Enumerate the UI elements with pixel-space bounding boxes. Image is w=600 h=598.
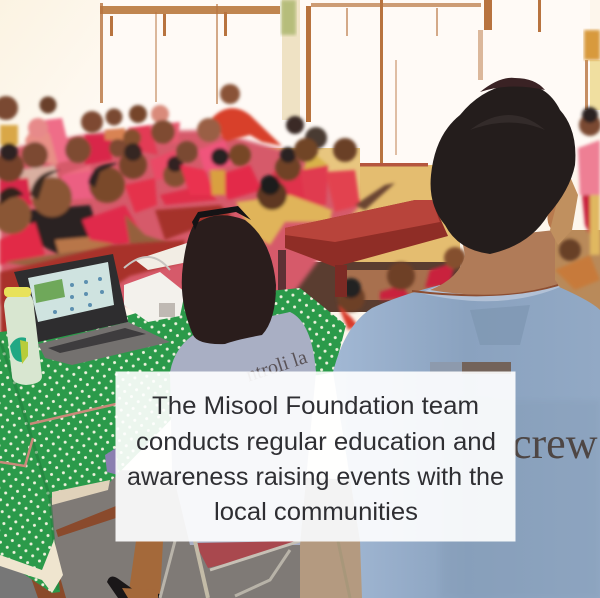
woman grey shirt <box>170 312 316 545</box>
caption line 1: The Misool Foundation team <box>152 392 479 420</box>
shoe <box>107 576 160 598</box>
desk: left row <box>0 240 185 345</box>
caption line 3: awareness raising events with the <box>127 463 504 491</box>
right-side students <box>337 107 600 330</box>
man blue t-shirt <box>333 283 600 598</box>
lace trim <box>0 540 63 593</box>
shirt lettering: ntroli la <box>243 346 310 386</box>
water bottle <box>4 287 42 385</box>
caption line 2: conducts regular education and <box>136 428 496 456</box>
man hair <box>431 84 575 254</box>
laptop <box>14 254 170 365</box>
shirt logo <box>430 362 511 374</box>
projector <box>124 257 185 322</box>
windows <box>100 0 588 166</box>
desk: right table <box>278 200 448 297</box>
middle row students <box>0 137 395 213</box>
caption box <box>116 372 516 542</box>
plant decoration <box>281 0 600 60</box>
man from behind <box>333 78 600 598</box>
papers on desk <box>135 242 190 270</box>
folding chair <box>160 541 350 598</box>
sunglasses <box>192 206 251 230</box>
wooden desks <box>0 200 448 345</box>
floor <box>0 470 368 598</box>
caption line 4: local communities <box>214 498 418 526</box>
man ear <box>547 192 568 232</box>
woman leg <box>128 541 163 598</box>
shirt word crew: crew <box>512 419 598 468</box>
man neck <box>430 230 558 295</box>
presenter: woman from behind <box>105 206 316 598</box>
woman hair <box>182 215 276 344</box>
tablecloth <box>0 288 346 593</box>
back row students <box>0 96 328 182</box>
standing adult <box>212 84 282 146</box>
front row students <box>0 163 332 268</box>
students <box>0 84 600 330</box>
